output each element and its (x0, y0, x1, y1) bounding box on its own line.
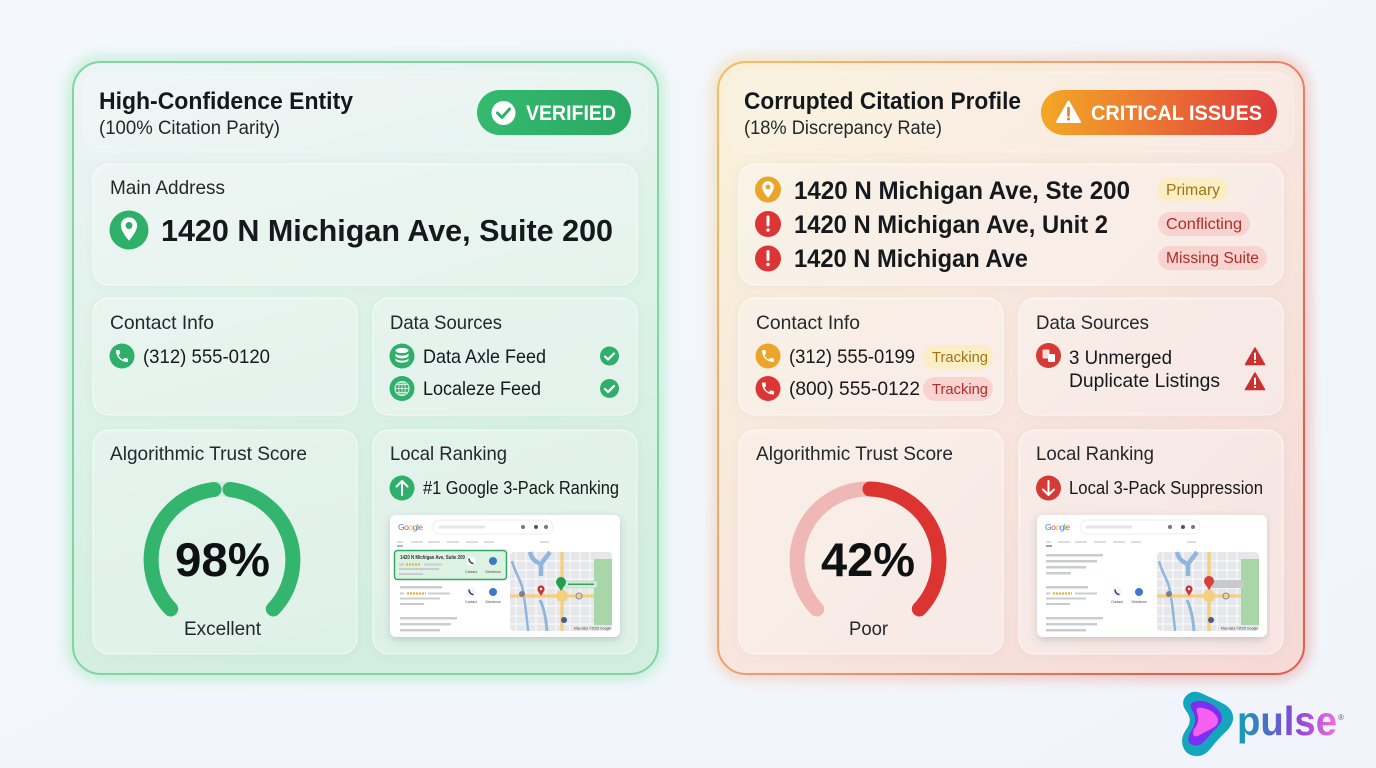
card: data sources: Data Axle Feed (423, 346, 546, 368)
header: high-confidence entity (83, 72, 648, 152)
icon: alert (755, 246, 781, 272)
gauge: 98% (151, 489, 293, 640)
icon: duplicate (1036, 343, 1061, 368)
card: contact info: (312) 555-0199 (789, 346, 915, 368)
tag: missing suite: Missing Suite (1166, 250, 1259, 267)
card: contact info (93, 298, 357, 415)
card: contact info: Contact Info (110, 312, 214, 334)
card: local ranking: Local 3-Pack Suppression (1069, 478, 1263, 498)
search results mockup: Directions (485, 600, 501, 604)
card: address variants: 1420 N Michigan Ave, Unit 2 (794, 211, 1108, 239)
card: data sources (1019, 298, 1283, 415)
card: contact info: Contact Info (756, 312, 860, 334)
logo: pulse (1182, 692, 1344, 756)
card: algorithmic trust score (739, 430, 1003, 654)
search results mockup (390, 515, 620, 637)
card: local ranking: #1 Google 3-Pack Ranking (423, 478, 619, 498)
card: contact info (739, 298, 1003, 415)
tag: primary: Primary (1166, 182, 1220, 199)
card: local ranking: Local Ranking (1036, 443, 1154, 465)
header: corrupted citation profile (728, 72, 1294, 152)
search results mockup: Contact (1111, 600, 1123, 604)
card: data sources: Localeze Feed (423, 378, 541, 400)
badge: verified: VERIFIED (526, 102, 616, 125)
card: main address: Main Address (110, 177, 225, 199)
search results mockup: Directions (1131, 600, 1147, 604)
tag: conflicting (1158, 212, 1250, 236)
icon: arrow down (1036, 476, 1061, 500)
subheading: (100% Citation Parity) (99, 118, 280, 139)
card: address variants (739, 164, 1283, 285)
gauge: 98%: Excellent (184, 619, 262, 640)
card: data sources (373, 298, 637, 415)
badge: critical issues: CRITICAL ISSUES (1091, 102, 1262, 125)
card: contact info: (800) 555-0122 (789, 378, 920, 400)
icon: check (600, 379, 619, 398)
icon: location pin (755, 176, 781, 202)
card: algorithmic trust score (93, 430, 357, 654)
icon: location pin (110, 210, 148, 250)
card: address variants: 1420 N Michigan Ave, Ste 200 (794, 177, 1130, 205)
card: data sources: Duplicate Listings (1069, 370, 1220, 392)
tag: tracking: Tracking (932, 349, 988, 366)
icon: globe (390, 376, 414, 401)
icon: phone (756, 376, 780, 401)
icon: alert (755, 211, 781, 237)
logo: pulse: pulse (1237, 698, 1337, 744)
card: data sources: 3 Unmerged (1069, 347, 1172, 369)
icon: warning (1246, 373, 1264, 390)
icon: phone (756, 344, 780, 368)
tag: primary (1157, 178, 1228, 202)
card: contact info: (312) 555-0120 (143, 346, 270, 368)
card: algorithmic trust score: Algorithmic Trust Score (110, 443, 307, 465)
card: data sources: Data Sources (1036, 312, 1149, 334)
card: address variants: 1420 N Michigan Ave (794, 245, 1028, 273)
card: algorithmic trust score: Algorithmic Trust Score (756, 443, 953, 465)
icon: warning (1246, 348, 1264, 364)
tag: conflicting: Conflicting (1166, 216, 1242, 233)
tag: tracking (923, 345, 993, 369)
card: main address (93, 164, 637, 285)
panel: corrupted citation profile (718, 62, 1304, 674)
tag: tracking (923, 377, 993, 401)
panel: high-confidence entity (73, 62, 658, 674)
heading: Corrupted Citation Profile (744, 88, 1021, 115)
subheading: (18% Discrepancy Rate) (744, 118, 942, 139)
icon: phone (110, 344, 134, 368)
card: data sources: Data Sources (390, 312, 502, 334)
icon: arrow up (390, 476, 414, 500)
search results mockup: Contact (465, 570, 477, 574)
badge: critical issues (1041, 90, 1277, 135)
gauge: 42% (797, 489, 939, 640)
card: local ranking: Local Ranking (390, 443, 507, 465)
search results mockup: 1420 N Michigan Ave, Suite 200 (400, 555, 465, 561)
card: local ranking (373, 430, 637, 654)
card: local ranking (1019, 430, 1283, 654)
heading: High-Confidence Entity (99, 88, 353, 115)
tag: tracking: Tracking (932, 381, 988, 398)
search results mockup: Directions (485, 570, 501, 574)
tag: missing suite (1158, 246, 1267, 270)
search results mockup: Contact (465, 600, 477, 604)
card: main address: 1420 N Michigan Ave, Suite 200 (161, 214, 613, 248)
badge: verified (477, 90, 631, 135)
search results mockup (1037, 515, 1267, 637)
gauge: 42%: Poor (849, 619, 889, 640)
logo: pulse: ® (1338, 713, 1344, 722)
icon: database (390, 344, 414, 368)
gauge: 42%: 42% (821, 533, 915, 586)
gauge: 98%: 98% (175, 533, 270, 586)
icon: pulse blob (1182, 692, 1233, 756)
icon: check (600, 346, 619, 366)
